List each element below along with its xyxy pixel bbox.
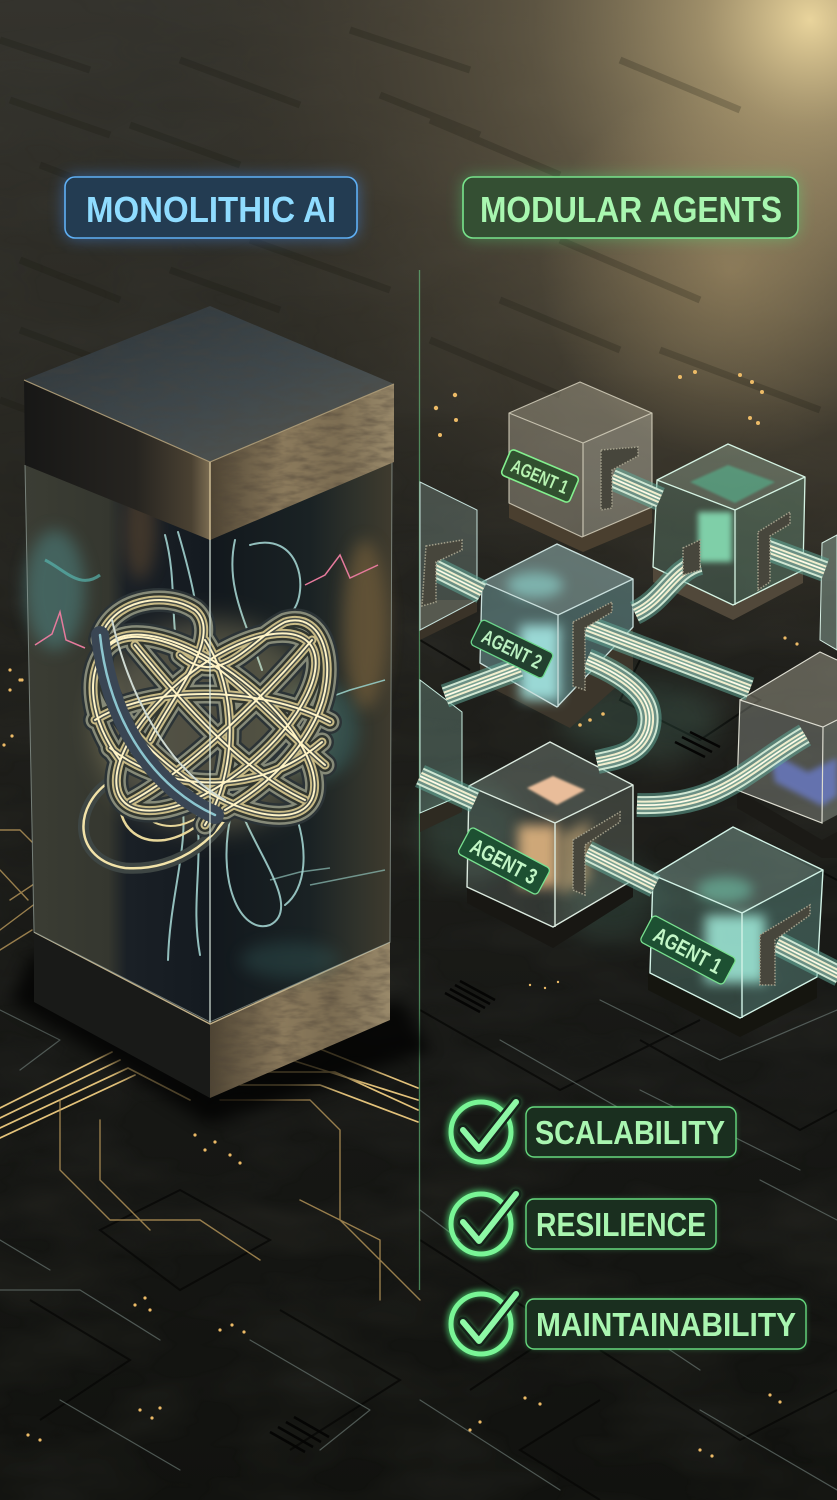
label: MAINTAINABILITY bbox=[536, 1306, 796, 1343]
label: RESILIENCE bbox=[536, 1206, 706, 1243]
label: agent 1 front: AGENT 1 bbox=[649, 922, 726, 979]
label bbox=[526, 1199, 716, 1249]
label: agent 3 bbox=[457, 827, 551, 895]
monolith base bbox=[34, 932, 390, 1098]
circuit traces bbox=[0, 830, 837, 1490]
heading: modular agents bbox=[463, 177, 798, 238]
holographic chart traces bbox=[35, 555, 385, 885]
glass agent cube: top right with green core bbox=[653, 444, 805, 620]
knot glow bbox=[95, 620, 325, 830]
comparison divider bbox=[418, 270, 420, 1290]
tangled knot of cables bbox=[73, 540, 344, 1022]
label: agent 3: AGENT 3 bbox=[466, 834, 541, 889]
glass agent cube: agent 2 bbox=[480, 544, 633, 728]
floor vents bbox=[270, 732, 720, 1452]
glass agent cube: lower left edge bbox=[420, 680, 462, 832]
glass agent cube: upper right edge bbox=[820, 535, 837, 650]
monolith shadow bbox=[10, 950, 430, 1125]
benefit: scalability bbox=[450, 1101, 736, 1163]
monolith: opaque base, glass body and metal cap bbox=[10, 306, 430, 1125]
label bbox=[526, 1107, 736, 1157]
label: agent 1 back: AGENT 1 bbox=[508, 456, 571, 499]
scattered gold dots bbox=[2, 370, 799, 1458]
benefit: resilience bbox=[450, 1193, 716, 1255]
label: SCALABILITY bbox=[535, 1114, 725, 1151]
chip connectors bbox=[422, 447, 810, 985]
benefit: maintainability bbox=[450, 1293, 806, 1355]
label: agent 2: AGENT 2 bbox=[478, 626, 545, 674]
glass agent cube: upper left edge bbox=[420, 482, 477, 640]
label: agent 2 bbox=[470, 619, 554, 679]
glass agent cube: right middle with blue chip bbox=[737, 652, 837, 858]
icon: check mark bbox=[450, 1101, 516, 1163]
agent labels bbox=[457, 449, 737, 985]
monolith glass body bbox=[25, 462, 392, 1022]
label: agent 1 back bbox=[500, 449, 580, 503]
teal cables behind the knot bbox=[165, 532, 304, 960]
heading: modular agents: MODULAR AGENTS bbox=[480, 189, 782, 230]
cable bundles between agents bbox=[420, 478, 837, 975]
monolith metal cap bbox=[24, 306, 394, 540]
icon: check mark bbox=[450, 1293, 516, 1355]
glass agent cube: agent 3 bbox=[467, 742, 633, 948]
icon: check mark bbox=[450, 1193, 516, 1255]
label bbox=[526, 1299, 806, 1349]
glass agent cube: front agent 1 bbox=[648, 827, 823, 1037]
heading: monolithic AI bbox=[65, 177, 357, 238]
heading: monolithic AI: MONOLITHIC AI bbox=[86, 189, 336, 230]
floor panels bbox=[30, 640, 837, 1500]
glass agent cube: back left bbox=[509, 382, 652, 552]
